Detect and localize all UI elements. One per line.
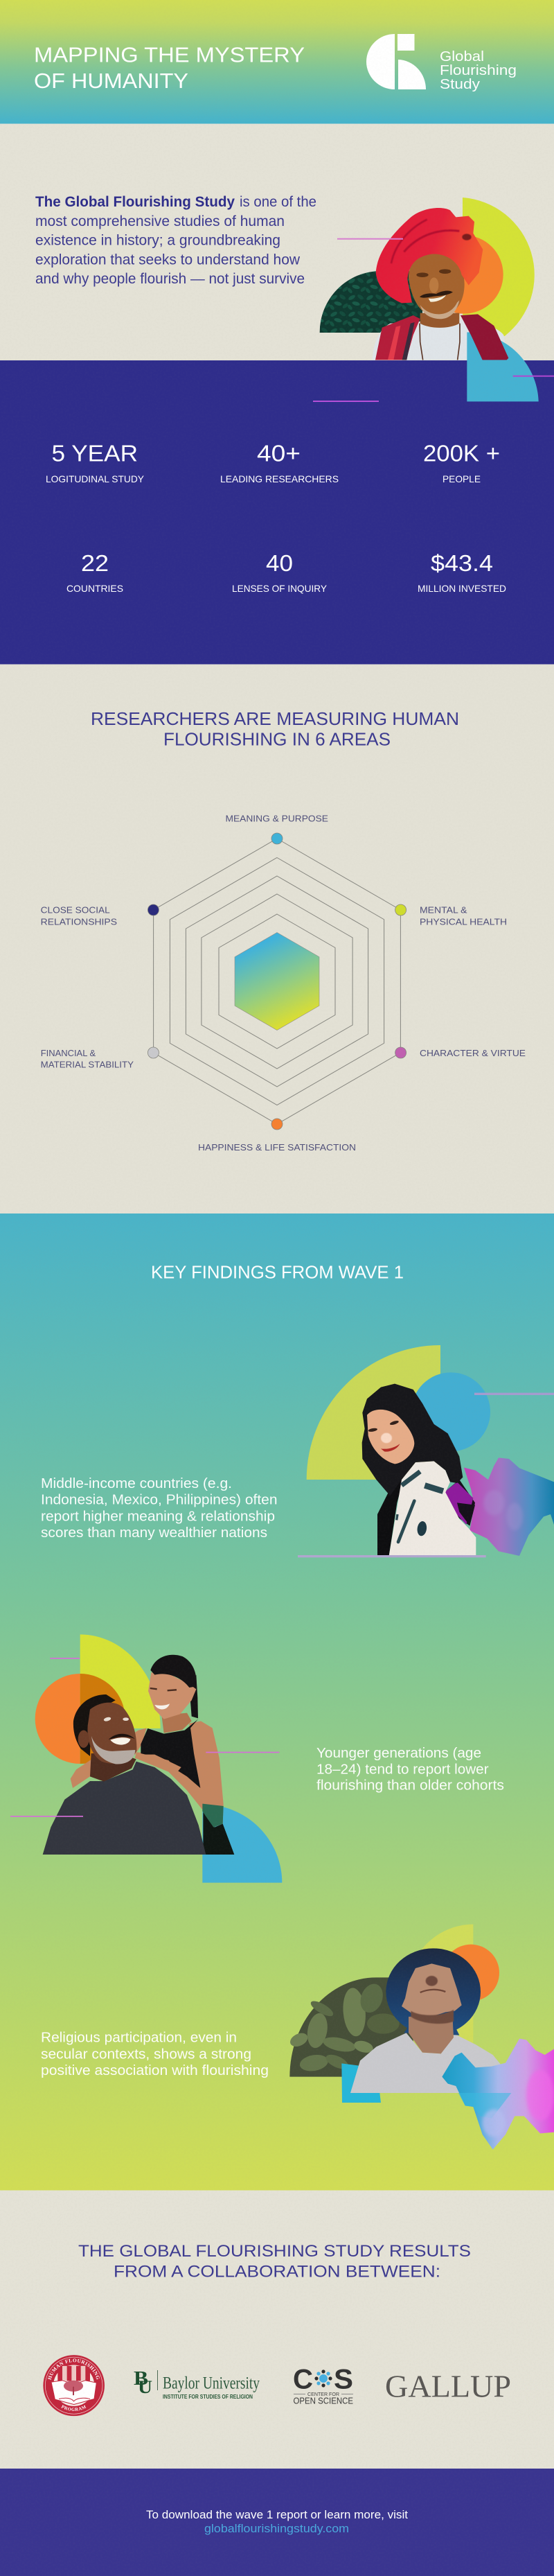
stat: 40+ leading researchers: LEADING RESEARCHERS — [220, 473, 339, 484]
panel: header banner — [0, 0, 554, 123]
finding 3 text: positive association with flourishing — [41, 2063, 269, 2078]
area labels: RELATIONSHIPS — [41, 917, 117, 927]
illustration: man in hat with shapes — [288, 1925, 554, 2150]
accent line — [513, 376, 554, 377]
finding 1 text: Indonesia, Mexico, Philippines) often — [41, 1492, 277, 1507]
stat: 5 year longitudinal study: LOGITUDINAL STUDY — [46, 473, 145, 484]
logo: Baylor University — [134, 2368, 260, 2400]
panel: key findings — [0, 1213, 554, 2190]
stat: 40 lenses of inquiry: 40 — [266, 551, 293, 577]
accent line — [474, 1393, 554, 1395]
stat: 200K+ people: 200K + — [423, 441, 500, 467]
area labels: CLOSE SOCIAL — [41, 905, 110, 915]
intro paragraph: and why people flourish — not just survive — [35, 271, 305, 287]
accent line — [298, 1555, 486, 1557]
logo: Human Flourishing Program seal — [43, 2355, 105, 2416]
logo: Global Flourishing Study — [366, 34, 517, 92]
illustration: older man and young woman with shapes — [10, 1634, 282, 1883]
heading: THE GLOBAL FLOURISHING STUDY RESULTS — [78, 2242, 471, 2261]
panel: introduction — [0, 123, 554, 360]
heading: RESEARCHERS ARE MEASURING HUMAN — [91, 710, 459, 729]
heading: FROM A COLLABORATION BETWEEN: — [114, 2263, 440, 2281]
heading — [78, 2242, 471, 2281]
logo: Baylor University: Baylor University — [163, 2374, 260, 2393]
logo: Human Flourishing Program seal: HUMAN FLOURISHING — [47, 2358, 100, 2380]
stat: 22 countries: COUNTRIES — [66, 583, 123, 594]
finding 3 text: Religious participation, even in — [41, 2031, 237, 2046]
intro paragraph: The Global Flourishing Study — [35, 194, 235, 210]
finding 1 text: Middle-income countries (e.g. — [41, 1476, 232, 1491]
stat: 5 year longitudinal study: 5 YEAR — [51, 441, 138, 467]
stat: $43.4 million invested: MILLION INVESTED — [418, 583, 506, 594]
stat: 40+ leading researchers — [220, 441, 339, 484]
heading: KEY FINDINGS FROM WAVE 1 — [151, 1262, 404, 1283]
shape: orange circle — [425, 235, 503, 314]
figure: woman — [71, 1655, 234, 1855]
area labels: PHYSICAL HEALTH — [420, 917, 507, 927]
logo: Global Flourishing Study: Global — [440, 49, 484, 64]
figure: man — [372, 208, 508, 360]
finding 1 text — [41, 1476, 277, 1541]
finding 3 text — [41, 2031, 269, 2078]
area labels: CHARACTER & VIRTUE — [420, 1048, 526, 1058]
illustration: woman in hijab with shapes — [298, 1345, 554, 1557]
logo: Baylor University: U — [138, 2377, 152, 2397]
logo: Center for Open Science — [293, 2365, 353, 2406]
shape: cyan bracket — [341, 2063, 381, 2103]
logo: Human Flourishing Program seal: PROGRAM — [61, 2405, 86, 2411]
panel: six areas of flourishing — [0, 664, 554, 1214]
finding 2 text — [316, 1746, 504, 1794]
area labels: MEANING & PURPOSE — [226, 813, 328, 823]
stat: $43.4 million invested: $43.4 — [431, 551, 493, 577]
logo: Center for Open Science: C — [293, 2365, 313, 2395]
intro paragraph: most comprehensive studies of human — [35, 213, 285, 229]
stat: 200K+ people — [423, 441, 500, 484]
shape: colour wave — [464, 1457, 554, 1556]
panel: key statistics — [0, 360, 554, 664]
shape: orange circle — [35, 1674, 80, 1764]
stat: $43.4 million invested — [418, 551, 506, 594]
area labels — [41, 813, 526, 1153]
logo: Center for Open Science: CENTER FOR — [307, 2391, 340, 2397]
shape: blue quarter circle — [467, 332, 539, 401]
finding 2 text: Younger generations (age — [316, 1746, 481, 1761]
shape: leaf dome — [320, 271, 422, 333]
figure: man in hat — [350, 1948, 511, 2093]
logo: Center for Open Science: S — [334, 2365, 353, 2395]
accent lines — [10, 1658, 279, 1817]
finding 1 text: scores than many wealthier nations — [41, 1525, 267, 1541]
stat: 5 year longitudinal study — [46, 441, 145, 484]
wave highlights — [483, 1490, 523, 1530]
shape: lime quarter circle — [307, 1345, 440, 1480]
patch: blue overlap on arm — [202, 1804, 224, 1828]
title: MAPPING THE MYSTERY — [34, 43, 305, 67]
panel: footer call to action — [0, 2469, 554, 2576]
shape: orange circle — [443, 1945, 499, 2001]
footer link: globalflourishingstudy.com — [204, 2523, 349, 2535]
area labels: MATERIAL STABILITY — [41, 1060, 134, 1070]
area labels: FINANCIAL & — [41, 1048, 96, 1058]
logo: Baylor University: INSTITUTE FOR STUDIES OF RELIGION — [163, 2393, 253, 2400]
finding 1 text: report higher meaning & relationship — [41, 1509, 275, 1524]
logo: Global Flourishing Study: Flourishing — [440, 62, 517, 78]
finding 3 text: secular contexts, shows a strong — [41, 2047, 251, 2062]
logo: Gallup: GALLUP — [385, 2369, 511, 2403]
shape: blue quarter circle — [202, 1804, 282, 1883]
shape: lime half circle — [408, 1925, 473, 2043]
title: OF HUMANITY — [34, 69, 188, 93]
area labels: HAPPINESS & LIFE SATISFACTION — [198, 1142, 356, 1153]
figure: woman — [362, 1384, 476, 1556]
figure: right vest over blue — [461, 314, 508, 360]
intro paragraph: exploration that seeks to understand how — [35, 252, 301, 268]
accent line: navy panel — [313, 401, 379, 402]
panel: collaborators — [43, 2242, 511, 2416]
shape: blue circle — [411, 1372, 490, 1451]
logo: Center for Open Science: OPEN SCIENCE — [294, 2395, 353, 2406]
stat: 40 lenses of inquiry: LENSES OF INQUIRY — [232, 583, 328, 594]
shape: lime quarter — [80, 1634, 161, 1728]
stat: 40+ leading researchers: 40+ — [257, 441, 301, 467]
logo: Global Flourishing Study: Study — [440, 76, 481, 92]
intro paragraph — [35, 194, 316, 287]
logo: Baylor University: B — [134, 2368, 148, 2390]
intro paragraph: is one of the — [240, 194, 316, 210]
hexagon radar chart — [148, 833, 406, 1130]
stat: 200K+ people: PEOPLE — [443, 473, 481, 484]
shape: lime half circle — [463, 198, 535, 336]
shape: colour wave — [442, 2039, 554, 2150]
intro paragraph: existence in history; a groundbreaking — [35, 233, 280, 249]
illustration: man in red turban with shapes — [320, 198, 554, 401]
shape: leaf dome — [288, 1977, 413, 2077]
area labels: MENTAL & — [420, 905, 467, 915]
figure: man — [43, 1694, 206, 1855]
stat: 22 countries: 22 — [81, 551, 109, 577]
heading: FLOURISHING IN 6 AREAS — [163, 730, 391, 749]
heading — [91, 710, 459, 749]
footer text: To download the wave 1 report or learn more, visit — [146, 2509, 408, 2521]
finding 2 text: 18–24) tend to report lower — [316, 1762, 489, 1777]
finding 2 text: flourishing than older cohorts — [316, 1778, 504, 1794]
node dots — [148, 833, 406, 1130]
center gradient hexagon — [235, 933, 319, 1030]
accent line — [337, 238, 403, 240]
stat: 22 countries — [66, 551, 123, 594]
shape: orange overlap — [80, 1674, 125, 1764]
title — [34, 43, 305, 93]
stat: 40 lenses of inquiry — [232, 551, 328, 594]
